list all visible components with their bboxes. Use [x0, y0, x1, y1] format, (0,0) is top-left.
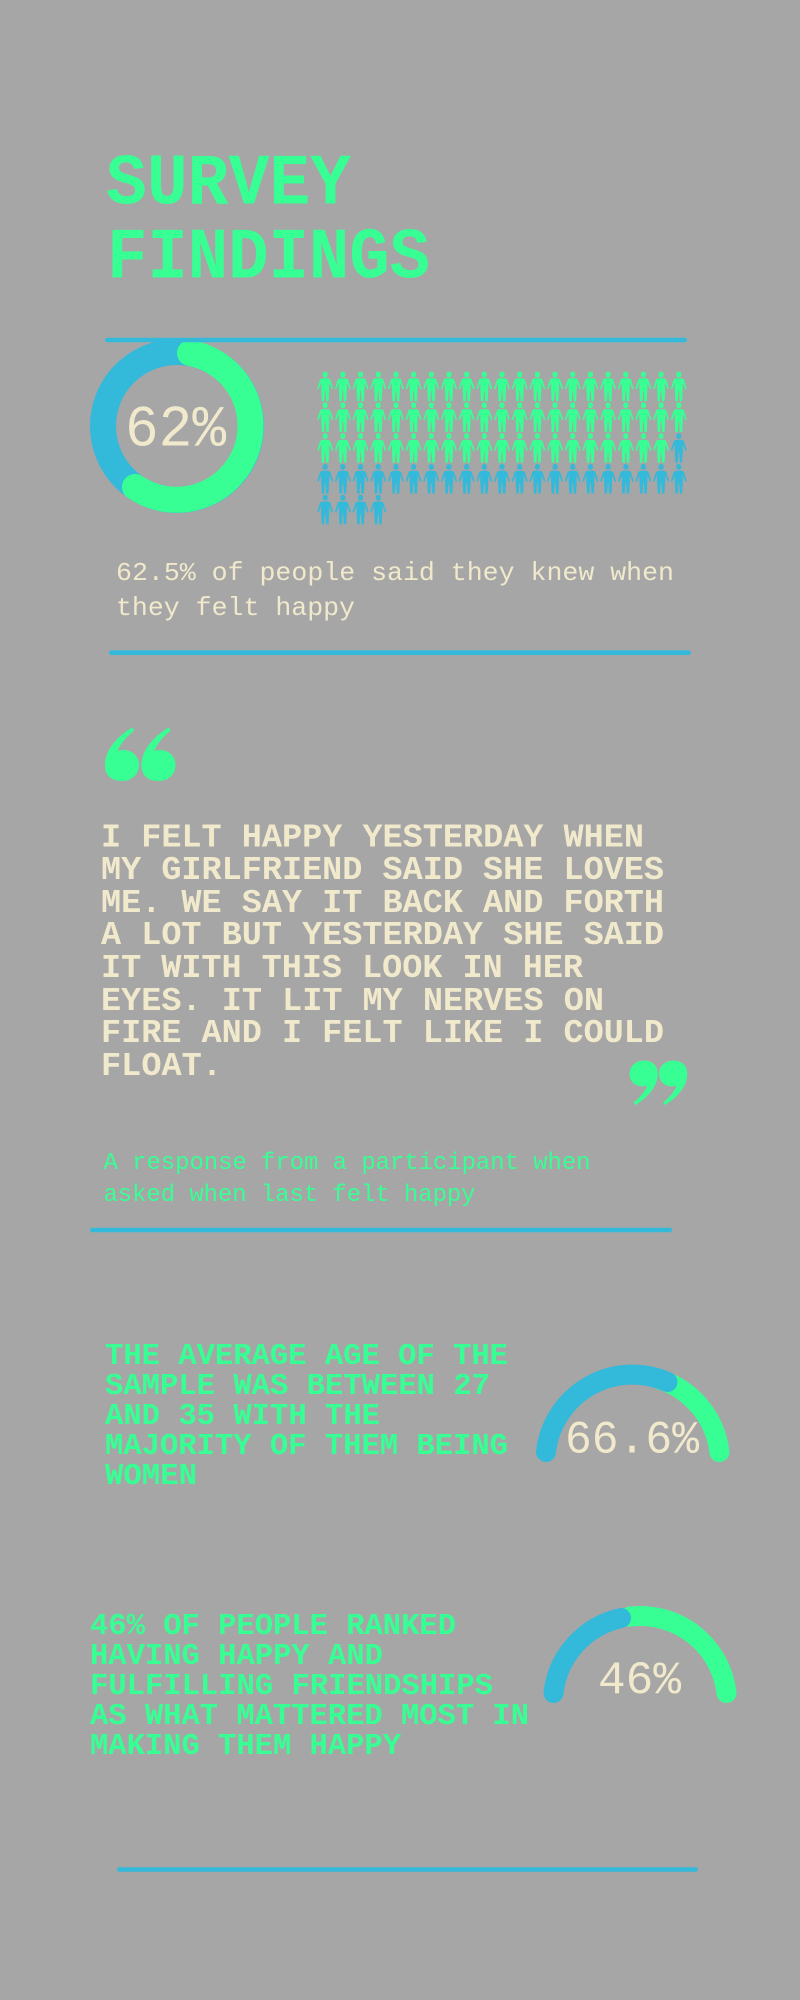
gauge: 66.6% [546, 1375, 719, 1466]
quote text: FIRE AND I FELT LIKE I COULD [101, 1015, 664, 1052]
quote text: I FELT HAPPY YESTERDAY WHEN [101, 819, 644, 856]
title: SURVEY [106, 144, 352, 226]
gauge: 46% [554, 1616, 726, 1707]
quote attribution [104, 1150, 590, 1209]
donut chart: 62%: 62% [125, 398, 226, 464]
pictogram: people [317, 372, 687, 524]
gauge: 66.6%: 66.6% [565, 1414, 699, 1466]
age statement: THE AVERAGE AGE OF THE [105, 1340, 508, 1374]
panel: happiness awareness [103, 352, 687, 623]
panel: participant quote [101, 728, 687, 1209]
age statement [105, 1340, 508, 1494]
friendships statement: HAVING HAPPY AND [90, 1640, 383, 1674]
gauge: 46%: 46% [598, 1655, 681, 1707]
caption: 62.5% statement [116, 558, 674, 623]
bottom divider [117, 1867, 698, 1872]
quote text: MY GIRLFRIEND SAID SHE LOVES [101, 852, 664, 889]
quote text: FLOAT. [101, 1048, 222, 1085]
panel: friendships [90, 1610, 726, 1764]
age statement: AND 35 WITH THE [105, 1400, 380, 1434]
panel: average age [105, 1340, 719, 1494]
friendships statement [90, 1610, 529, 1764]
donut chart: 62% [103, 352, 251, 500]
caption: 62.5% statement: 62.5% of people said they knew when [116, 558, 674, 588]
friendships statement: FULFILLING FRIENDSHIPS [90, 1670, 493, 1704]
quote text: A LOT BUT YESTERDAY SHE SAID [101, 917, 664, 954]
friendships statement: MAKING THEM HAPPY [90, 1730, 402, 1764]
age statement: SAMPLE WAS BETWEEN 27 [105, 1370, 490, 1404]
title [106, 144, 430, 300]
quote text: ME. WE SAY IT BACK AND FORTH [101, 885, 664, 922]
quote text: EYES. IT LIT MY NERVES ON [101, 983, 604, 1020]
age statement: MAJORITY OF THEM BEING [105, 1430, 508, 1464]
quote attribution: A response from a participant when [104, 1150, 590, 1177]
age statement: WOMEN [105, 1460, 197, 1494]
divider below caption [109, 650, 691, 655]
divider below quote [90, 1228, 672, 1232]
friendships statement: 46% OF PEOPLE RANKED [90, 1610, 456, 1644]
friendships statement: AS WHAT MATTERED MOST IN [90, 1700, 529, 1734]
quote text [101, 819, 664, 1085]
quote text: IT WITH THIS LOOK IN HER [101, 950, 583, 987]
top divider [105, 338, 687, 342]
caption: 62.5% statement: they felt happy [116, 593, 355, 623]
title: FINDINGS [107, 218, 430, 300]
quote attribution: asked when last felt happy [104, 1182, 476, 1209]
icon: closing quotation mark [630, 1061, 687, 1105]
icon: opening quotation mark [105, 728, 176, 781]
